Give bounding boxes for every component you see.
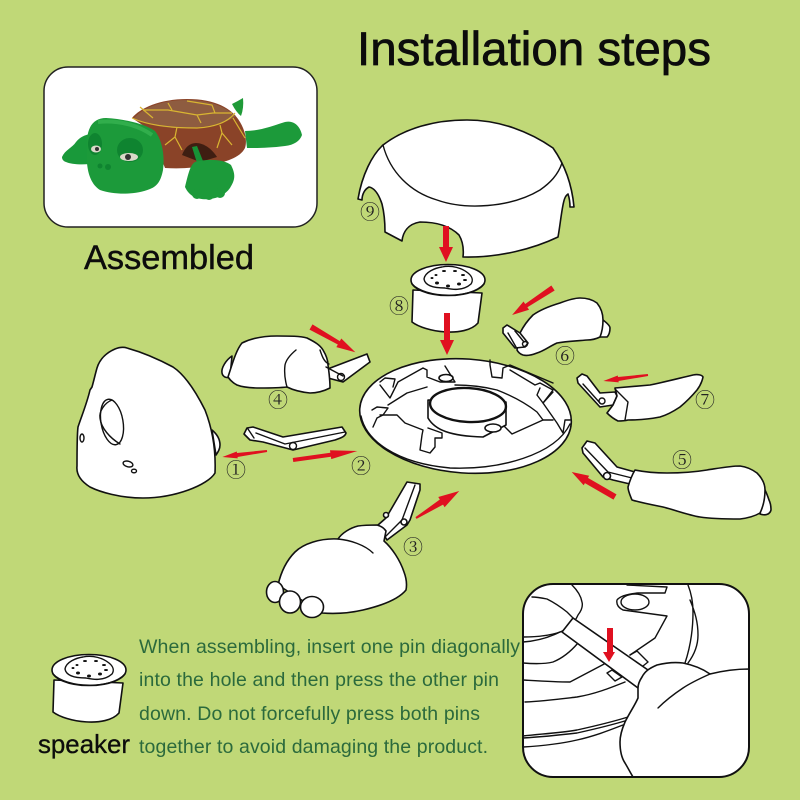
panel: assembled turtle photo <box>44 67 317 227</box>
part 7: leg <box>577 374 703 421</box>
icon: turtle rear leg <box>245 122 302 148</box>
arrow: part 5 <box>569 467 618 502</box>
label 5: ⑤ <box>672 444 692 473</box>
arrow: part 7 <box>603 372 648 384</box>
part 6: leg <box>503 298 610 355</box>
arrow: part 6 <box>509 284 556 319</box>
icon: turtle eyes <box>88 133 143 162</box>
text block: assembling instructions: together to avoid damaging the product. <box>139 736 488 758</box>
icon: head highlight <box>98 122 152 135</box>
arrow: speaker to base <box>440 313 454 355</box>
icon: turtle front-left leg <box>62 134 90 164</box>
center ring <box>428 400 506 437</box>
icon: speaker <box>52 654 126 722</box>
label 9: ⑨ <box>360 196 380 225</box>
foot outline <box>620 663 749 777</box>
text block: assembling instructions <box>139 636 520 758</box>
icon: turtle front-right foot <box>185 160 234 200</box>
icon: leg opening <box>182 143 217 162</box>
label 4: ④ <box>268 384 288 413</box>
part 5: leg <box>582 441 771 519</box>
icon: turtle tail <box>232 98 243 116</box>
label 8: ⑧ <box>389 290 409 319</box>
icon: turtle nostrils <box>98 164 111 170</box>
title: Installation steps <box>357 22 711 75</box>
icon: leg strip <box>192 146 203 163</box>
part: base <box>356 352 575 480</box>
label 3: ③ <box>403 531 423 560</box>
label 1: ① <box>226 454 246 483</box>
arrow: press down <box>603 628 615 662</box>
icon: turtle shell <box>132 99 246 168</box>
arrow: part 3 <box>413 486 462 523</box>
label 7: ⑦ <box>695 384 715 413</box>
label 6: ⑥ <box>555 340 575 369</box>
label 2: ② <box>351 450 371 479</box>
icon: shell top <box>134 100 236 128</box>
part 1: head <box>77 347 220 498</box>
icon: turtle head <box>87 118 164 194</box>
arrow: part 4 <box>309 323 358 357</box>
heading: assembled: Assembled <box>84 239 254 277</box>
text block: assembling instructions: When assembling, insert one pin diagonally <box>139 636 520 658</box>
text block: assembling instructions: into the hole and then press the other pin <box>139 669 499 691</box>
part 2: pin <box>244 427 346 450</box>
arrow: shell to speaker <box>439 226 453 262</box>
label: speaker: speaker <box>38 729 130 759</box>
part 4: leg <box>222 336 370 393</box>
part 8: speaker <box>411 264 485 332</box>
icon: shell pattern <box>132 101 245 150</box>
part 9: shell <box>358 120 574 257</box>
part 3: foot <box>266 482 420 618</box>
pin strip <box>562 618 648 688</box>
panel: pin insertion detail <box>523 584 749 777</box>
text block: assembling instructions: down. Do not forcefully press both pins <box>139 703 480 725</box>
arrow: part 1 <box>222 448 267 460</box>
arrow: part 2 <box>292 446 358 464</box>
